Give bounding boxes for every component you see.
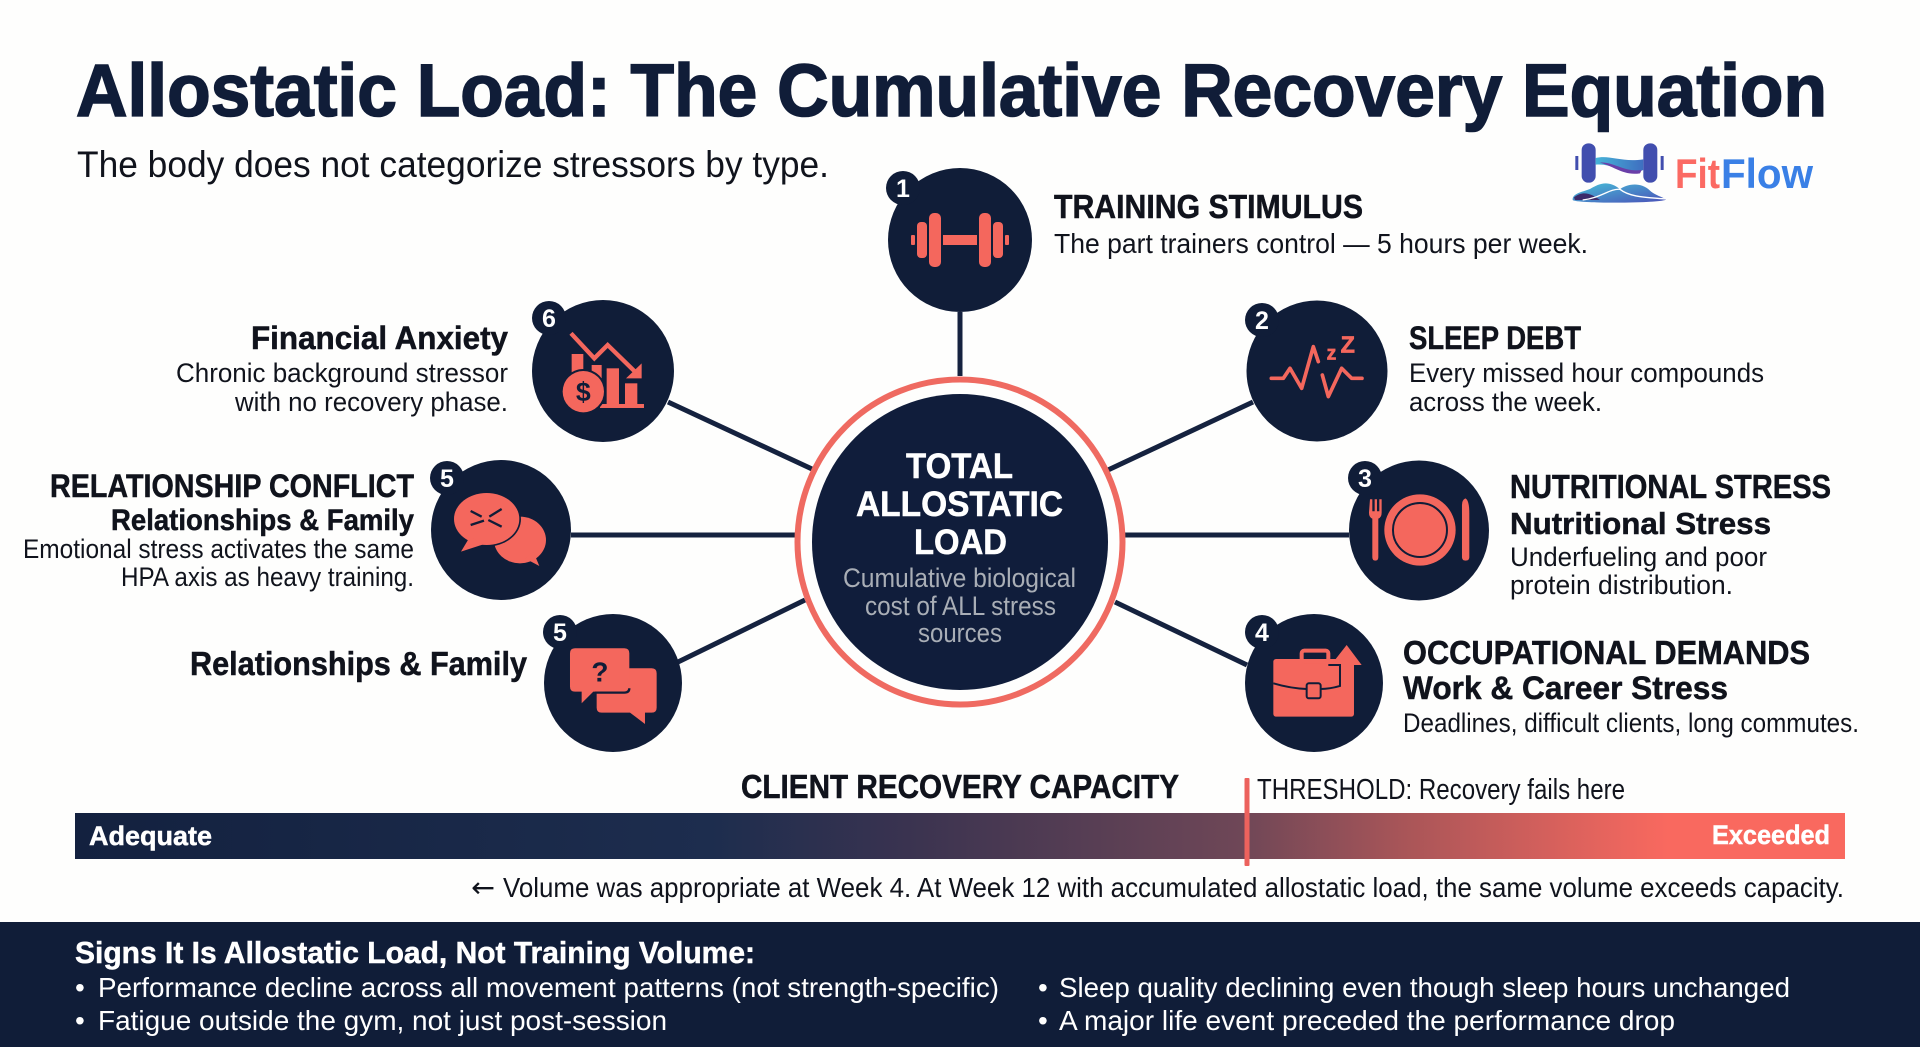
icon: question speech bubbles: ? <box>591 657 609 688</box>
hub description <box>843 563 1076 648</box>
text: nutritional stress: Nutritional Stress <box>1510 506 1771 541</box>
capacity note: ← <box>471 871 495 904</box>
text: occupational demands: OCCUPATIONAL DEMANDS <box>1403 634 1810 671</box>
text: relationship conflict: Emotional stress activates the same <box>23 534 414 564</box>
footer panel: signs <box>0 922 1920 1047</box>
node 5: relationships and family: 5 <box>553 619 567 647</box>
hub description: sources <box>918 618 1002 648</box>
text: occupational demands <box>1403 634 1859 738</box>
hub heading: TOTAL <box>906 447 1013 486</box>
node 6: financial anxiety: 6 <box>542 305 556 333</box>
icon: falling chart and coin: $ <box>576 377 591 407</box>
text: sleep debt <box>1409 320 1764 417</box>
text: training stimulus: The part trainers control — 5 hours per week. <box>1054 228 1588 259</box>
text: training stimulus <box>1054 188 1588 259</box>
bar label: adequate: Adequate <box>89 821 212 851</box>
capacity gradient bar <box>75 813 1845 859</box>
capacity heading: CLIENT RECOVERY CAPACITY <box>741 768 1179 805</box>
text: nutritional stress <box>1510 468 1831 600</box>
bullets: right column <box>1038 972 1790 1036</box>
bullets: left column: • <box>75 972 85 1003</box>
hub heading <box>856 447 1063 562</box>
node 2: sleep debt: 2 <box>1255 307 1269 335</box>
node 5: relationship conflict: 5 <box>440 465 454 493</box>
text: training stimulus: TRAINING STIMULUS <box>1054 188 1363 225</box>
text: relationship conflict: RELATIONSHIP CONFLICT <box>50 468 414 504</box>
text: occupational demands: Deadlines, difficult clients, long commutes. <box>1403 708 1859 738</box>
icon: briefcase with arrow <box>1273 645 1362 717</box>
threshold marker <box>1244 778 1250 866</box>
logo: FitFlow <box>1573 143 1813 203</box>
icon: sleep pulse <box>1271 332 1362 397</box>
bullets: right column: Sleep quality declining even though sleep hours unchanged <box>1059 972 1790 1003</box>
node 1: training stimulus <box>886 168 1588 312</box>
icon: plate and cutlery <box>1369 494 1469 566</box>
icon: dumbbell <box>911 213 1009 267</box>
text: relationships and family: Relationships & Family <box>190 645 528 682</box>
hub description: Cumulative biological <box>843 563 1076 593</box>
threshold label: THRESHOLD: Recovery fails here <box>1257 774 1625 806</box>
text: nutritional stress: protein distribution. <box>1510 570 1733 600</box>
bullets: left column: • <box>75 1005 85 1036</box>
text: nutritional stress: Underfueling and poor <box>1510 542 1767 572</box>
text: financial anxiety: with no recovery phase. <box>234 387 508 417</box>
logo wordmark: Flow <box>1721 150 1813 197</box>
node 5: relationships and family <box>190 614 682 752</box>
bullets: right column: A major life event preceded the performance drop <box>1059 1005 1675 1036</box>
bar label: exceeded: Exceeded <box>1712 820 1830 850</box>
connector lines <box>571 312 1349 665</box>
text: sleep debt: across the week. <box>1409 387 1602 417</box>
node 4: occupational demands: 4 <box>1255 619 1269 647</box>
bullets: right column: • <box>1038 1005 1048 1036</box>
node 6: financial anxiety <box>176 300 674 442</box>
node 3: nutritional stress <box>1348 460 1831 600</box>
subtitle: The body does not categorize stressors by type. <box>77 144 829 185</box>
text: financial anxiety: Financial Anxiety <box>251 320 508 356</box>
node 5: relationship conflict <box>23 460 571 600</box>
icon: sleep pulse: z <box>1327 343 1336 364</box>
text: nutritional stress: NUTRITIONAL STRESS <box>1510 468 1831 505</box>
title: Allostatic Load: The Cumulative Recovery Equation <box>76 49 1827 132</box>
hub heading: ALLOSTATIC <box>856 485 1063 524</box>
text: financial anxiety: Chronic background stressor <box>176 358 508 388</box>
text: relationship conflict: Relationships & Family <box>111 504 414 537</box>
node 4: occupational demands <box>1245 614 1859 752</box>
hub heading: LOAD <box>914 523 1007 562</box>
text: relationship conflict <box>23 468 414 592</box>
capacity note: Volume was appropriate at Week 4. At Week 12 with accumulated allostatic load, the same volume exceeds capacity. <box>503 872 1844 903</box>
node 2: sleep debt <box>1245 300 1764 442</box>
text: sleep debt: Every missed hour compounds <box>1409 358 1764 388</box>
center hub: total allostatic load <box>798 380 1122 704</box>
icon: angry speech bubbles <box>452 491 546 566</box>
logo wordmark: Fit <box>1675 150 1720 197</box>
bullets: right column: • <box>1038 972 1048 1003</box>
bullets: left column: Fatigue outside the gym, not just post-session <box>98 1005 667 1036</box>
hub description: cost of ALL stress <box>865 591 1056 621</box>
icon: question speech bubbles <box>570 648 657 724</box>
node 3: nutritional stress: 3 <box>1358 465 1372 493</box>
bullets: left column: Performance decline across all movement patterns (not strength-specific) <box>98 972 999 1003</box>
icon: sleep pulse: Z <box>1341 332 1355 358</box>
text: sleep debt: SLEEP DEBT <box>1409 320 1581 356</box>
logo wordmark <box>1675 150 1813 197</box>
text: occupational demands: Work & Career Stress <box>1403 670 1728 706</box>
node 1: training stimulus: 1 <box>896 175 910 203</box>
text: financial anxiety <box>176 320 508 417</box>
icon: falling chart and coin <box>561 333 644 414</box>
footer heading: Signs It Is Allostatic Load, Not Training Volume: <box>75 935 755 970</box>
bullets: left column <box>75 972 999 1036</box>
logo icon: dumbbell and wave <box>1573 143 1666 203</box>
text: relationship conflict: HPA axis as heavy training. <box>121 562 414 592</box>
